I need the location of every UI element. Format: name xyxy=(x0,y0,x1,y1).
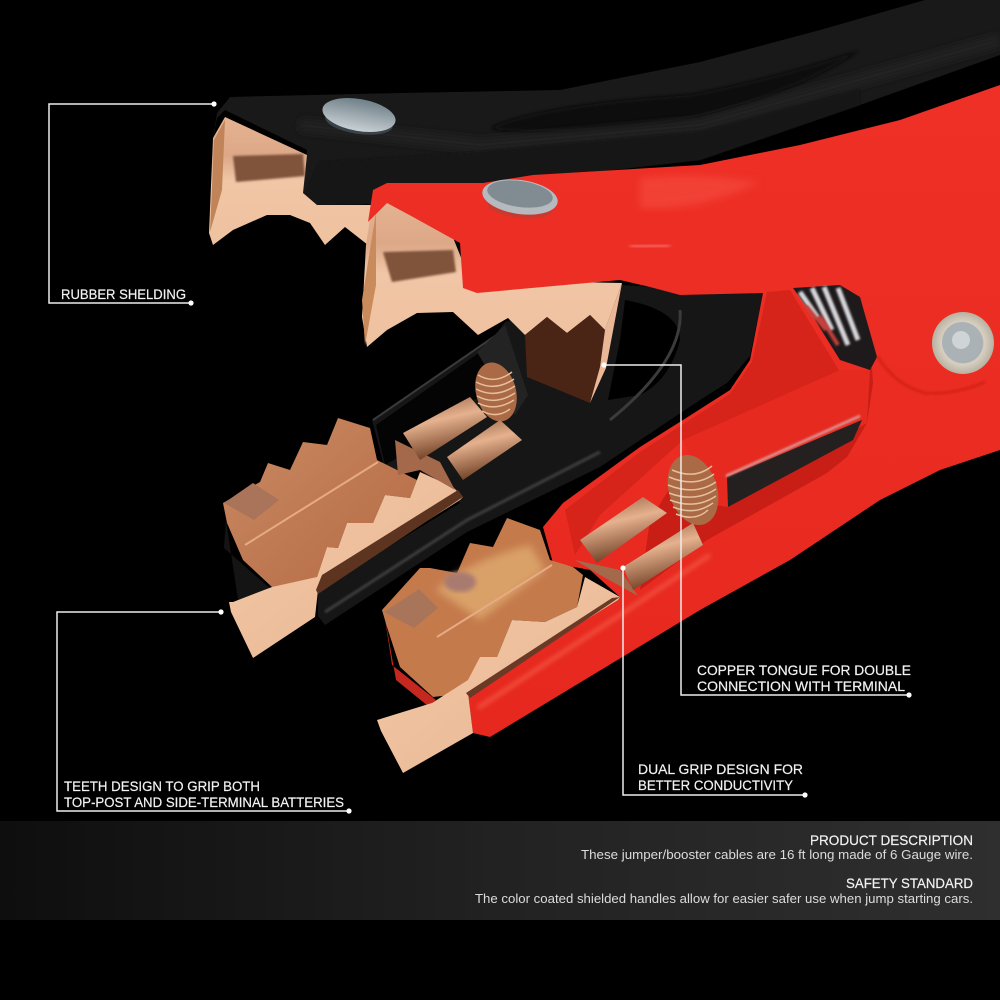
label: teeth design xyxy=(64,778,344,810)
black shell behind jaw xyxy=(224,520,272,600)
callout line: copper tongue xyxy=(601,362,912,698)
copper jaw: upper red xyxy=(362,200,622,403)
body crease around pivot xyxy=(878,357,985,393)
heading: safety standard: SAFETY STANDARD xyxy=(846,875,973,891)
black bar highlight xyxy=(325,452,600,612)
front bar highlight xyxy=(478,555,710,708)
label: dual grip: BETTER CONDUCTIVITY xyxy=(638,777,794,793)
copper tab xyxy=(384,589,438,628)
black arm body xyxy=(318,285,763,625)
crimp barrels xyxy=(403,397,487,460)
crimp strands xyxy=(575,560,638,596)
label: dual grip xyxy=(638,761,803,793)
label: dual grip: DUAL GRIP DESIGN FOR xyxy=(638,761,803,777)
bright front teeth xyxy=(229,472,463,658)
black wire boot xyxy=(477,325,528,415)
dark inner copper tooth xyxy=(525,315,605,403)
label: teeth design: TEETH DESIGN TO GRIP BOTH xyxy=(64,778,260,794)
clamp: black upper handle xyxy=(209,0,1000,245)
panel: product description band xyxy=(0,821,1000,920)
red wire insulation xyxy=(683,370,870,507)
label: teeth design: TOP-POST AND SIDE-TERMINAL BATTERIES xyxy=(64,794,344,810)
callout line: rubber shelding xyxy=(49,101,217,306)
wire window xyxy=(640,368,873,590)
label: rubber shelding: RUBBER SHELDING xyxy=(61,286,186,302)
icon: black handle rivet xyxy=(320,93,398,139)
dark copper back with teeth xyxy=(223,418,417,587)
copper jaw: upper black xyxy=(209,117,372,245)
red shell edge xyxy=(384,612,436,706)
red main silhouette xyxy=(368,85,1000,737)
heading: product description: PRODUCT DESCRIPTION xyxy=(810,832,973,848)
crimp strands black xyxy=(395,440,455,490)
copper jaw: lower black xyxy=(223,397,522,658)
copper strands: red xyxy=(659,448,727,532)
arm inner dark shadow xyxy=(376,345,520,465)
dark copper back with teeth xyxy=(382,518,583,697)
handle top highlight xyxy=(640,176,760,208)
label: copper tongue: COPPER TONGUE FOR DOUBLE xyxy=(697,662,911,678)
copper jaw: lower red xyxy=(377,497,703,773)
text: product description: These jumper/booster cables are 16 ft long made of 6 Gauge wire. xyxy=(581,848,973,862)
icon: red handle rivet xyxy=(480,175,560,221)
label: copper tongue: CONNECTION WITH TERMINAL xyxy=(697,678,905,694)
text: safety standard: The color coated shielded handles allow for easier safer use when jump starting cars. xyxy=(475,892,973,906)
crimp barrels xyxy=(580,497,667,563)
red inner arm shade xyxy=(565,290,840,555)
callout line: dual grip xyxy=(620,565,808,798)
clamp: red handle and body xyxy=(368,85,1000,737)
icon: pivot bolt xyxy=(932,312,994,374)
black handle body xyxy=(213,0,1000,205)
spring coil xyxy=(793,285,877,370)
clamp: black lower arm xyxy=(224,285,763,625)
callout line: teeth design xyxy=(57,609,352,814)
copper strands: black xyxy=(469,358,523,426)
copper tab xyxy=(224,483,279,520)
label: copper tongue xyxy=(697,662,911,694)
bright front teeth xyxy=(377,577,620,773)
